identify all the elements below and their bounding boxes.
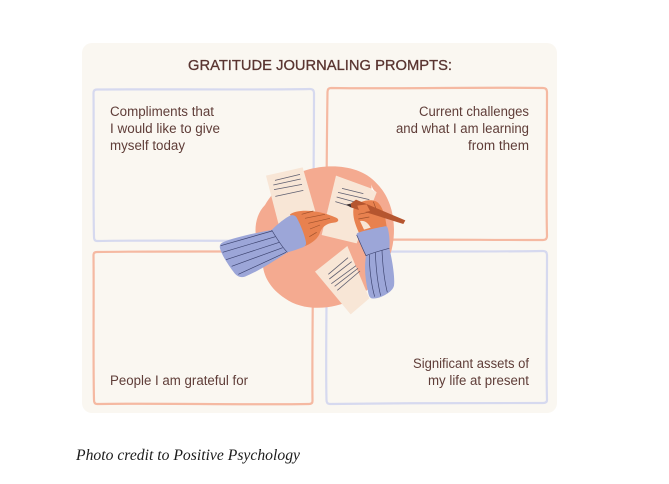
pencil [346, 200, 405, 224]
photo credit caption: Photo credit to Positive Psychology [75, 447, 301, 464]
panel: grateful people frame [94, 251, 313, 404]
panel: background card [82, 43, 557, 413]
text: challenges prompt [396, 104, 529, 153]
paper: bottom [315, 246, 369, 314]
text: compliments prompt: I would like to give [110, 121, 220, 136]
text: compliments prompt: myself today [110, 138, 185, 153]
text: people prompt: People I am grateful for [110, 373, 248, 388]
left sleeve [220, 215, 306, 277]
text: challenges prompt: from them [468, 138, 529, 153]
text: assets prompt: my life at present [428, 373, 529, 388]
text: assets prompt [413, 356, 529, 388]
blob [255, 166, 394, 308]
paper: top right [322, 176, 377, 243]
fingers over pencil [357, 204, 370, 213]
title: GRATITUDE JOURNALING PROMPTS: [188, 57, 452, 74]
panel: assets frame [326, 251, 547, 404]
panel: compliments frame [94, 89, 314, 241]
panel: challenges frame [327, 88, 547, 240]
text: compliments prompt: Compliments that [110, 104, 214, 119]
text: challenges prompt: Current challenges [419, 104, 529, 119]
right sleeve [357, 226, 394, 299]
illustration: hands writing on paper [220, 166, 405, 314]
text: assets prompt: Significant assets of [413, 356, 529, 371]
left hand [290, 211, 338, 247]
paper: top left [266, 167, 317, 233]
text: challenges prompt: and what I am learning [396, 121, 529, 136]
right hand [353, 200, 387, 235]
text: compliments prompt [110, 104, 220, 153]
